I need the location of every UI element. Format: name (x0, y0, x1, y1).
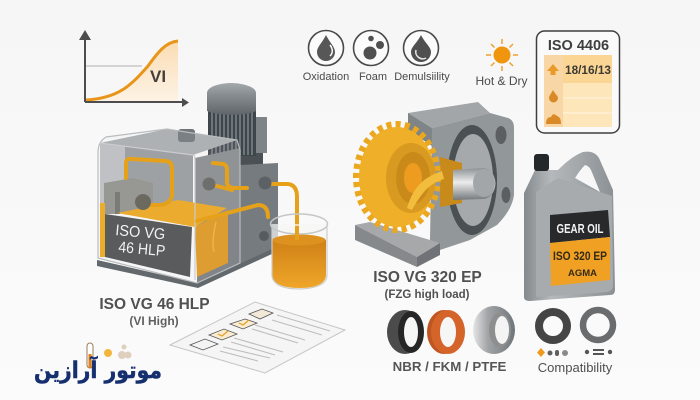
ISO 4406 card (536, 31, 620, 133)
viscosity index chart (79, 30, 189, 107)
caption: ISO VG 46 HLP: (VI High) (129, 314, 179, 328)
label panel: ISO VG (115, 222, 166, 243)
ring: PTFE (473, 306, 515, 354)
caption: ISO VG 46 HLP (99, 296, 210, 328)
beaker of oil (270, 214, 328, 289)
logo sun and bubbles (104, 344, 132, 359)
ring: NBR (387, 310, 424, 354)
logo: Motor Arazin: موتور آرازین (34, 355, 162, 384)
caption: seal materials: NBR / FKM / PTFE (393, 359, 507, 374)
gear oil bottle: AGMA (568, 268, 597, 279)
icon: demulsibility (404, 30, 438, 66)
hot and dry: Hot & Dry (475, 74, 528, 88)
compatibility: Compatibility (538, 360, 613, 375)
tank base (97, 248, 274, 288)
checklist sheet (170, 302, 345, 373)
label: oxidation: Oxidation (303, 71, 349, 83)
logo: Motor Arazin (34, 343, 162, 384)
label: foam: Foam (359, 71, 387, 83)
compatibility rings (539, 310, 613, 340)
ISO 4406 card: 18/16/13 (565, 65, 611, 77)
internal oil (100, 203, 105, 257)
filler cap (178, 129, 195, 142)
hot and dry (475, 39, 528, 88)
ISO 4406 card: ISO 4406 (548, 38, 609, 54)
label: demulsibility: Demulsiility (394, 71, 450, 83)
electric motor (207, 83, 267, 168)
icon: sun (486, 39, 518, 71)
hydraulic power unit (97, 83, 297, 288)
label panel: 46 HLP (118, 239, 166, 260)
logo thermometer (87, 343, 93, 368)
gear oil bottle: GEAR OIL (556, 222, 604, 236)
compatibility (537, 310, 613, 375)
caption: ISO VG 320 EP: (FZG high load) (385, 289, 470, 301)
tank right body (197, 160, 278, 283)
property icons row (303, 30, 450, 83)
ring: FKM (427, 310, 465, 354)
caption: ISO VG 320 EP: ISO VG 320 EP (373, 269, 482, 286)
viscosity index chart: VI (150, 67, 166, 86)
glass enclosure (98, 129, 240, 283)
label panel (105, 214, 192, 277)
pump block (104, 178, 153, 214)
icon: foam (354, 30, 388, 66)
icon: oxidation (308, 30, 344, 66)
compatibility indicators (537, 348, 612, 357)
gear oil bottle: ISO 320 EP (553, 251, 607, 263)
worm shaft (440, 157, 462, 207)
worm gearbox (355, 102, 514, 267)
gear oil bottle (524, 152, 615, 301)
worm gear (357, 125, 444, 229)
caption: ISO VG 46 HLP: ISO VG 46 HLP (99, 296, 210, 313)
housing foot (355, 222, 440, 257)
tank rear interior (100, 129, 237, 155)
caption: ISO VG 320 EP (373, 269, 482, 301)
gearbox housing (408, 102, 514, 250)
seal rings (387, 306, 515, 354)
oil pipes (126, 159, 297, 238)
